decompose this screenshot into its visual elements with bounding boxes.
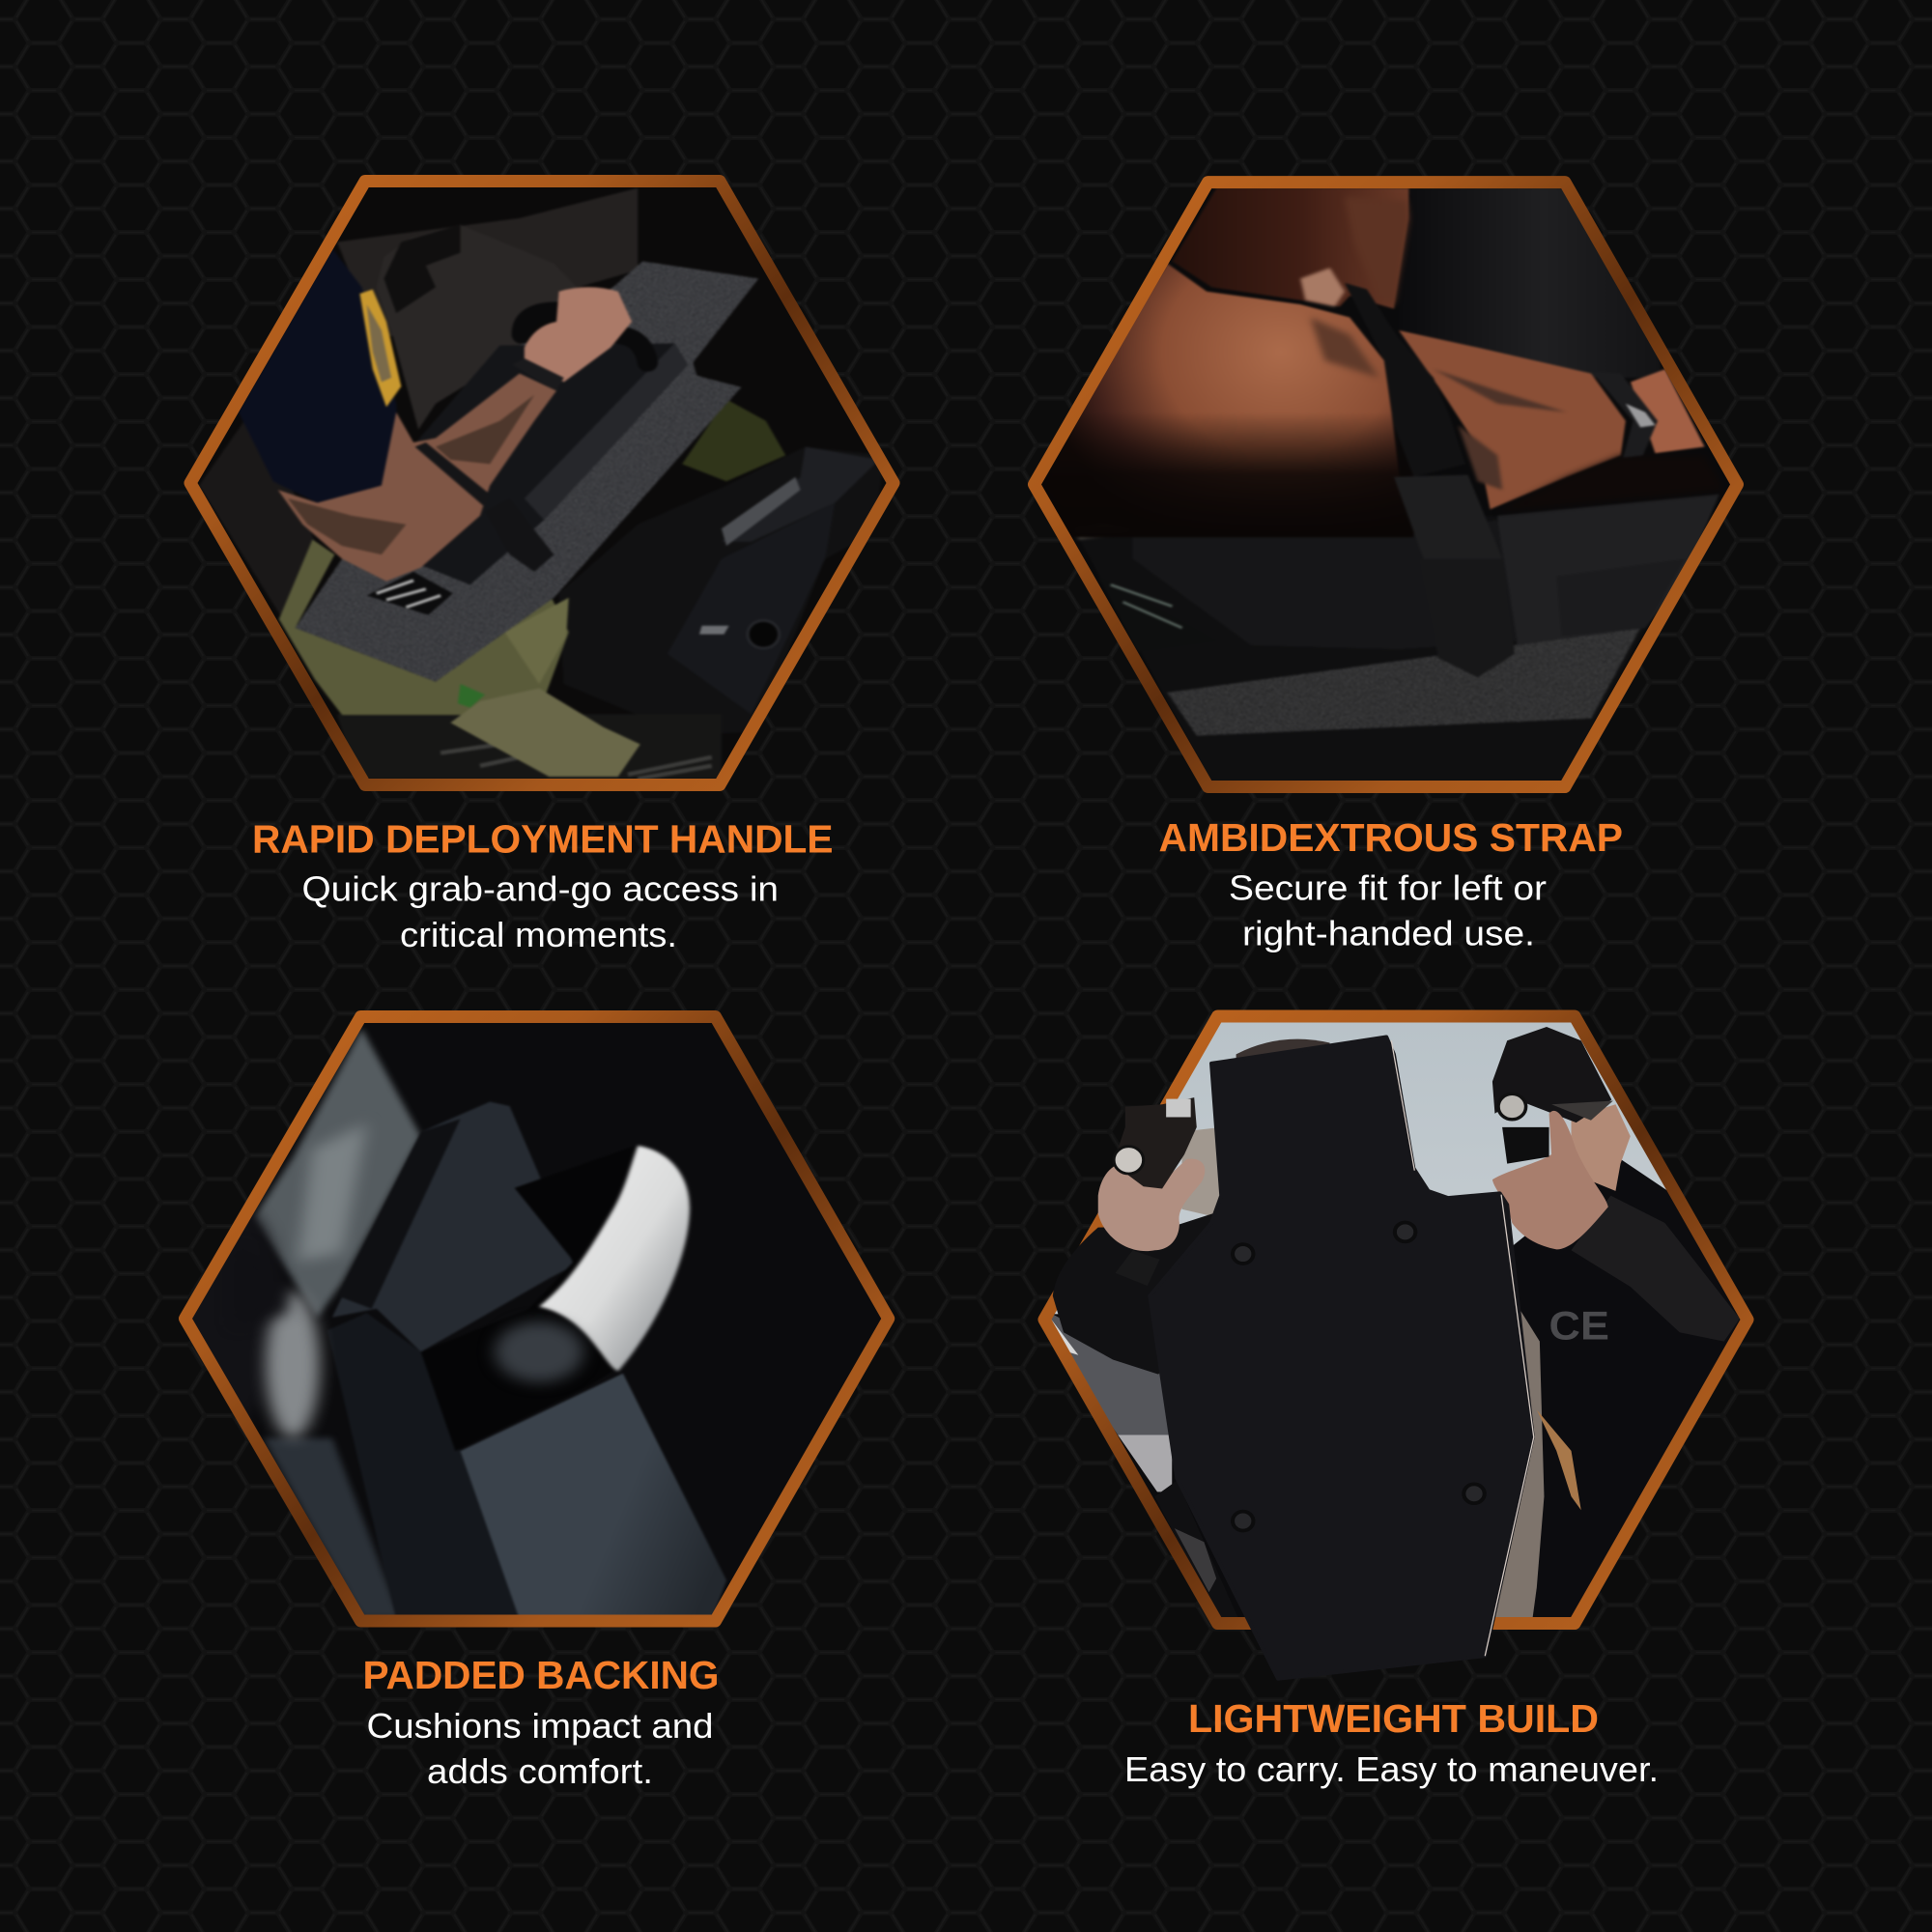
- caption: ambidextrous strap: right-handed use.: [1242, 914, 1535, 952]
- caption: lightweight build: LIGHTWEIGHT BUILD: [1188, 1696, 1599, 1741]
- panel: rapid deployment handle photo: [184, 175, 900, 791]
- caption: ambidextrous strap: Secure fit for left or: [1229, 867, 1547, 908]
- speckled plate band: [1167, 628, 1640, 736]
- panel: lightweight build photo: [1037, 1010, 1754, 1681]
- caption: ambidextrous strap: [1159, 815, 1623, 952]
- shield bolts: [1233, 1222, 1485, 1530]
- caption: padded backing: adds comfort.: [427, 1751, 653, 1791]
- vest lettering: CE: [1549, 1304, 1609, 1349]
- caption: ambidextrous strap: AMBIDEXTROUS STRAP: [1159, 815, 1623, 860]
- caption: rapid deployment handle: critical moments.: [400, 915, 677, 954]
- hexagon frame: [1034, 183, 1737, 787]
- shield cutout: [1150, 1037, 1534, 1679]
- panel: padded backing photo: [178, 1010, 895, 1627]
- caption: lightweight build: Easy to carry. Easy to maneuver.: [1124, 1749, 1659, 1789]
- panel: ambidextrous strap photo: [1028, 176, 1745, 793]
- hexagon frame: [185, 1016, 889, 1621]
- caption: lightweight build: [1124, 1696, 1659, 1789]
- caption: padded backing: Cushions impact and: [367, 1706, 713, 1746]
- caption: rapid deployment handle: RAPID DEPLOYMENT HANDLE: [252, 817, 833, 862]
- officer arms and hands overlapping the frame: [1053, 1094, 1608, 1375]
- speckled plate: [296, 262, 758, 682]
- caption: rapid deployment handle: Quick grab-and-go access in: [301, 869, 779, 908]
- caption: rapid deployment handle: [252, 817, 833, 954]
- caption: padded backing: [363, 1653, 719, 1791]
- caption: padded backing: PADDED BACKING: [363, 1653, 719, 1697]
- hexagon frame: [190, 182, 894, 784]
- hexagon frame: [1044, 1016, 1747, 1623]
